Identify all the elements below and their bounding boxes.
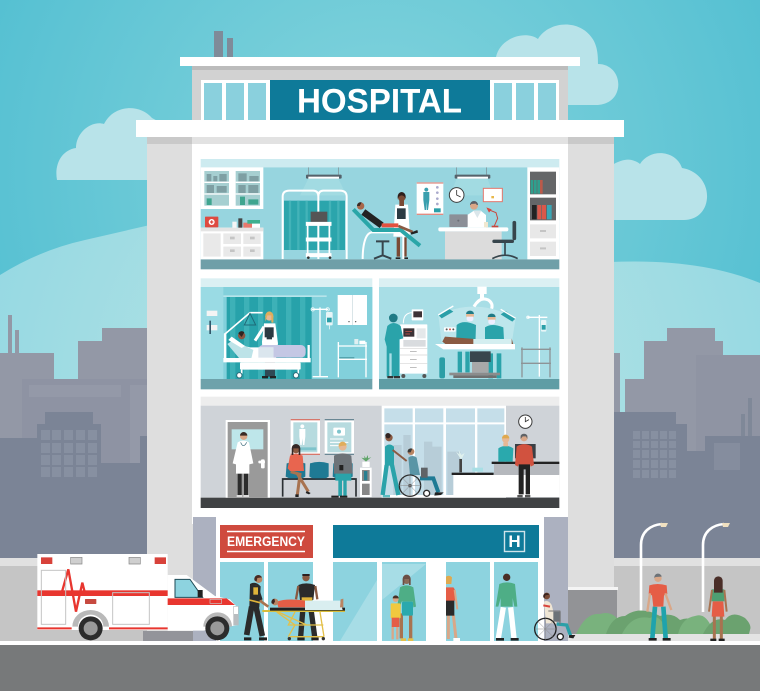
stretcher	[262, 611, 345, 640]
hills	[0, 225, 760, 500]
privacy curtain	[283, 191, 347, 259]
city skyline: left	[0, 315, 147, 560]
rear doors	[41, 570, 66, 624]
reception window	[382, 406, 506, 498]
pedestrians	[391, 574, 727, 641]
person in wheelchair	[535, 593, 575, 640]
entrance windows	[220, 562, 538, 641]
rooftop windows	[204, 83, 556, 120]
man in green	[496, 574, 519, 641]
woman entering	[446, 576, 460, 641]
anatomy poster	[417, 182, 443, 215]
oxygen tank	[439, 357, 445, 378]
monitor	[515, 444, 536, 458]
stretcher patient	[270, 599, 345, 611]
paramedic right	[296, 574, 319, 640]
receptionist	[498, 435, 513, 462]
medicine bottles	[232, 218, 260, 228]
office chair	[492, 223, 518, 259]
background bushes	[576, 610, 750, 634]
side cart	[338, 339, 367, 377]
IV stand	[527, 315, 547, 377]
patient on chair	[357, 202, 418, 235]
wall cabinet	[338, 295, 367, 325]
cloud: right	[612, 153, 707, 220]
wheelchair patient	[399, 448, 444, 496]
wall posters	[291, 419, 354, 455]
paramedics with stretcher	[244, 574, 345, 640]
ceiling lamps	[300, 167, 494, 195]
waiting room chairs	[283, 462, 356, 497]
desk doctor	[467, 201, 486, 227]
chimneys	[214, 31, 233, 57]
medical cart with monitor	[307, 212, 331, 259]
instrument cart	[521, 347, 551, 377]
man in coral shirt	[647, 574, 671, 641]
woman in red skirt	[709, 576, 727, 641]
nurse from behind	[385, 314, 403, 378]
city skyline: right	[610, 328, 760, 560]
cloud: top right	[496, 25, 618, 105]
panel: patient ward	[201, 278, 372, 389]
desk with laptop and lamp	[438, 207, 508, 259]
surgeons	[456, 311, 504, 378]
street lamps	[641, 523, 730, 612]
background ground strip	[0, 558, 760, 641]
icon: first aid kit	[205, 217, 218, 227]
side table with plant	[360, 455, 372, 497]
title: HOSPITAL	[297, 82, 462, 120]
panel: ground floor entrance	[193, 517, 568, 641]
seated man	[331, 442, 353, 498]
mother and child	[391, 575, 416, 641]
IV stand	[311, 307, 333, 377]
panel: operating room	[379, 278, 559, 389]
roof lights	[41, 557, 166, 564]
drawers and counter	[201, 228, 263, 259]
wheelchair nurse	[383, 433, 407, 497]
cloud: left	[56, 108, 165, 180]
surgical lamp	[438, 287, 516, 343]
hospital bed	[223, 313, 311, 378]
medicine cabinet	[201, 167, 263, 209]
blue hospital sign: H	[508, 532, 521, 551]
road	[0, 641, 760, 691]
seated woman	[288, 444, 311, 497]
blue hospital sign	[333, 525, 539, 558]
exam chair	[353, 209, 420, 259]
ambulance body	[37, 554, 239, 631]
roof slab	[136, 120, 624, 137]
door and doctor	[226, 420, 270, 498]
doctor with clipboard	[393, 192, 410, 259]
shelves and files	[527, 167, 559, 259]
reception desk	[452, 450, 559, 497]
wall outlets	[207, 311, 217, 334]
ambulance wheels	[72, 610, 232, 640]
bed curtain	[223, 295, 327, 379]
panel: examination room	[201, 159, 559, 269]
wall clock	[519, 415, 532, 428]
wall clock	[449, 188, 464, 202]
rooftop storey	[180, 57, 580, 122]
nurse	[255, 311, 278, 378]
panel: reception and waiting room	[201, 397, 559, 508]
anesthesia monitor	[400, 309, 427, 378]
man at desk	[515, 434, 534, 497]
ambulance	[37, 554, 239, 640]
operating table and patient	[435, 337, 515, 378]
sidewalk	[568, 634, 760, 641]
emergency sign	[220, 525, 313, 558]
certificate	[483, 188, 502, 202]
building: columns and core	[143, 135, 618, 641]
paramedic left	[244, 575, 268, 640]
emergency sign: EMERGENCY	[227, 534, 305, 549]
